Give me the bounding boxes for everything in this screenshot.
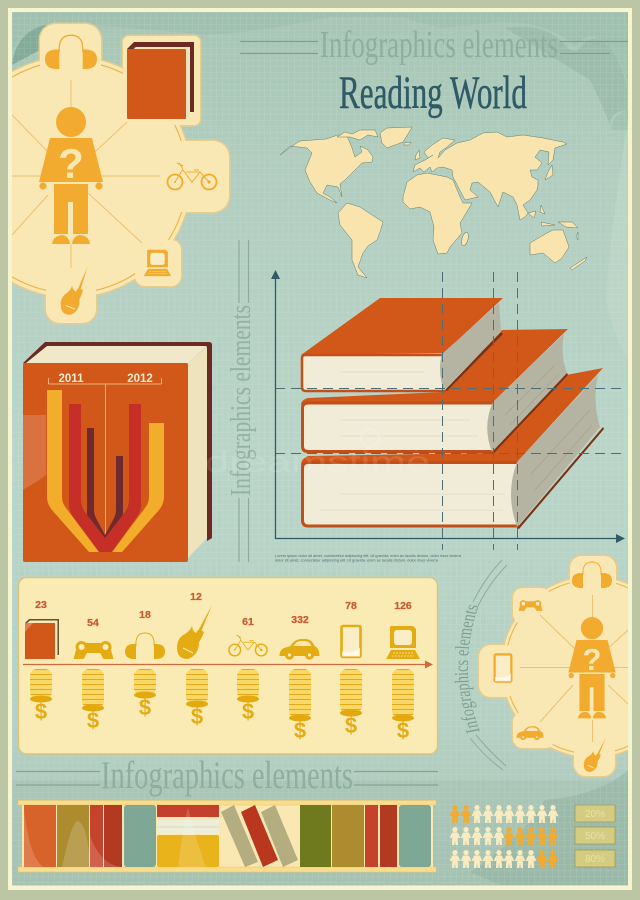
eurasia — [413, 132, 567, 220]
values: 126 — [394, 600, 412, 612]
icon: guitar — [177, 605, 212, 659]
icon: tablet — [495, 654, 511, 682]
middle book — [301, 329, 568, 453]
x axis arrow — [616, 534, 625, 543]
wheel ring — [505, 580, 640, 754]
row 50 percent — [450, 827, 558, 845]
icon: controller — [518, 600, 542, 611]
heading: curved infographics elements — [454, 560, 508, 770]
chart caption: dolor sit amet, consectetur adipiscing elit. Ut gravida, enim ac iaculis dictum, dolor risus viverra — [275, 558, 438, 562]
wheel tabs — [479, 556, 616, 776]
percent labels — [575, 805, 615, 867]
coin stack 23: $ — [35, 699, 47, 724]
person with question mark — [39, 107, 103, 244]
icon: car — [516, 726, 544, 740]
coin stack 126 — [392, 669, 414, 743]
book cover — [23, 363, 188, 562]
book top pages — [26, 346, 207, 363]
bars yellow right — [112, 423, 164, 552]
tilted books — [221, 805, 298, 867]
south america — [338, 203, 383, 278]
shelf top board — [18, 800, 436, 805]
chart dashed guides — [275, 272, 625, 550]
wheel body — [502, 577, 640, 757]
heading: curved infographics elements: Infographics elements — [454, 605, 480, 734]
coin stack 23 — [30, 669, 52, 724]
coin stack 12: $ — [191, 704, 203, 729]
coin stack 78 — [340, 669, 362, 738]
shelf back — [22, 803, 433, 869]
book back cover — [23, 342, 212, 541]
coin stack 12 — [186, 669, 208, 729]
panel: left person wheel — [0, 24, 229, 323]
icon: headphones — [572, 562, 612, 588]
cover highlight — [23, 415, 46, 490]
wheel body — [0, 57, 191, 297]
person with question mark — [568, 617, 616, 718]
book side pages — [188, 347, 207, 558]
bars yellow left — [47, 390, 99, 552]
icon: bicycle — [229, 635, 267, 656]
row 20 percent — [450, 805, 558, 823]
person with question mark: ? — [58, 140, 84, 187]
wheel tabs — [40, 24, 229, 323]
spokes — [520, 595, 628, 742]
panel background — [18, 578, 438, 754]
bars dark — [87, 428, 123, 545]
greenland — [380, 127, 412, 148]
values: 12 — [190, 591, 202, 603]
icon: laptop — [144, 250, 171, 276]
coin stack 18 — [134, 669, 156, 720]
coin stack 332 — [289, 669, 311, 743]
icon: book — [127, 42, 194, 119]
icon: headphones — [125, 633, 165, 659]
coin stacks — [30, 669, 414, 743]
panel: bookshelf — [18, 800, 436, 872]
islands — [404, 142, 587, 270]
world map — [280, 127, 587, 278]
year label 2011: 2011 — [59, 373, 84, 385]
africa — [403, 173, 472, 254]
values: 78 — [345, 600, 357, 612]
coin stack 61: $ — [242, 699, 254, 724]
y axis arrow — [271, 270, 280, 279]
values: 61 — [242, 616, 254, 628]
top book — [301, 298, 503, 391]
coin stack 78: $ — [345, 713, 357, 738]
australia — [530, 230, 569, 263]
coin stack 18: $ — [139, 695, 151, 720]
coin stack 54: $ — [87, 708, 99, 733]
wheel base outline — [479, 556, 640, 776]
north america — [280, 135, 373, 203]
icon: tablet — [342, 626, 360, 657]
panel: orange book with chart — [23, 342, 212, 562]
chart: stacked books — [271, 270, 625, 562]
icon: game controller — [74, 641, 114, 659]
row 80 percent — [450, 850, 558, 868]
shelf bottom board — [18, 867, 436, 872]
chart caption — [275, 554, 461, 562]
heading: infographics elements bottom: Infographics elements — [101, 754, 353, 797]
label 20%: 20% — [585, 809, 605, 820]
values: 18 — [139, 609, 151, 621]
icon: laptop — [386, 626, 420, 659]
icon: small book — [25, 619, 59, 659]
watermark — [205, 429, 430, 479]
panel: right person wheel — [479, 556, 640, 776]
values: 54 — [87, 617, 99, 629]
wheel base outline — [0, 24, 229, 323]
panel: timeline prices — [18, 578, 438, 754]
values: 332 — [291, 614, 309, 626]
title: Reading World — [339, 67, 527, 119]
axis lines — [48, 378, 162, 540]
icon: guitar — [57, 266, 92, 316]
wheel ring — [0, 61, 187, 293]
coin stack 126: $ — [397, 718, 409, 743]
chart axes — [276, 276, 618, 538]
coin stack 332: $ — [294, 718, 306, 743]
right group of books — [300, 805, 431, 867]
icon: headphones — [45, 35, 97, 69]
label 80%: 80% — [585, 854, 605, 865]
year label 2012: 2012 — [127, 373, 153, 385]
bottom book — [301, 368, 604, 529]
arctic islands — [337, 130, 378, 140]
icon: guitar — [584, 738, 606, 772]
label 50%: 50% — [585, 831, 605, 842]
stacked books — [157, 805, 219, 867]
left group of books — [24, 805, 156, 867]
timeline arrow — [23, 660, 433, 668]
icon: bicycle — [168, 163, 216, 190]
spokes — [12, 80, 160, 268]
coin stack 61 — [237, 669, 259, 724]
person with question mark: ? — [583, 642, 601, 677]
shelf highlights — [24, 808, 206, 867]
watermark: dreamstime — [205, 446, 430, 479]
madagascar — [460, 231, 470, 247]
heading: vertical infographics elements: Infographics elements — [225, 305, 257, 496]
icon: car — [280, 639, 320, 660]
chart caption: Lorem ipsum dolor sit amet, consectetur adipiscing elit. Ut gravida, enim ac iaculis dictum, dolor risus viverra — [275, 554, 461, 558]
bars red — [69, 404, 141, 552]
coin stack 54 — [82, 669, 104, 733]
pictogram people chart — [450, 805, 558, 868]
values — [35, 591, 412, 629]
values: 23 — [35, 599, 47, 611]
